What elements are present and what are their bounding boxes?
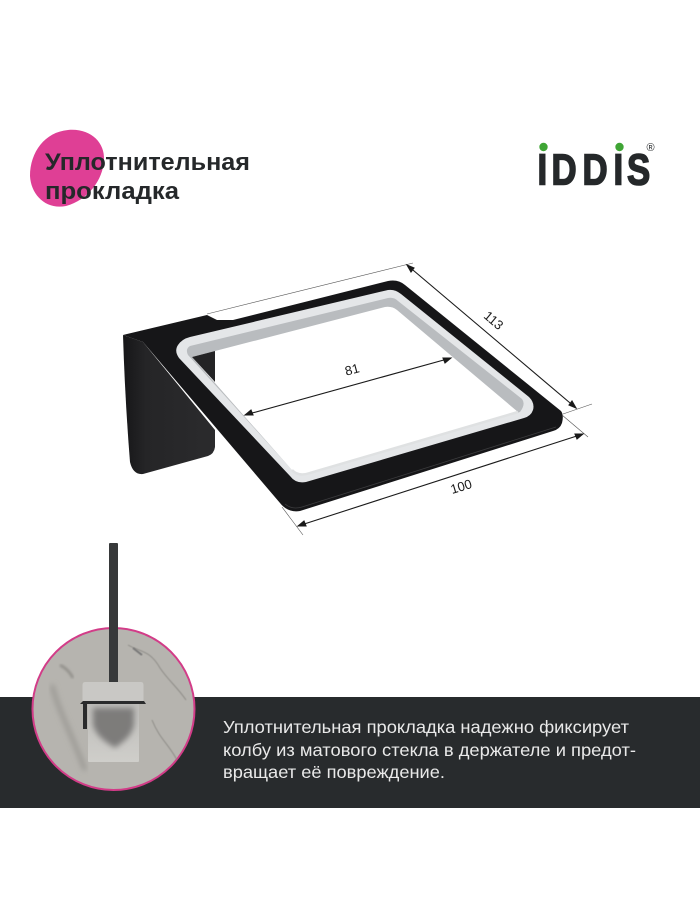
dimension 81: 81	[343, 360, 361, 379]
product: seal holder with dimensions	[123, 263, 592, 535]
seal grey band	[187, 298, 524, 475]
brush shadow in glass	[93, 708, 134, 748]
marble veins	[52, 645, 186, 770]
dimension 100: 100	[449, 476, 474, 497]
seal hole	[192, 307, 518, 474]
title: Уплотнительная	[45, 149, 250, 176]
logo: IDDIS: IDDIS	[538, 146, 650, 194]
glass body	[88, 703, 139, 762]
brush handle	[109, 543, 118, 686]
marble background	[32, 628, 194, 790]
extension lines	[207, 263, 592, 535]
glass rim	[82, 682, 144, 703]
marble circle with toilet brush	[32, 543, 194, 790]
wall mount	[123, 335, 215, 474]
description text	[223, 717, 636, 782]
seal front lip	[292, 412, 518, 474]
mount seen through hole	[192, 351, 215, 382]
holder bar	[80, 701, 146, 704]
description text: Уплотнительная прокладка надежно фиксирует	[223, 717, 629, 737]
description text: колбу из матового стекла в держателе и предот-	[223, 740, 636, 760]
tray frame	[123, 280, 563, 511]
dark text band	[0, 697, 700, 808]
title: прокладка	[45, 178, 179, 205]
seal outer	[176, 290, 534, 482]
pink blob behind heading	[30, 130, 104, 207]
dimension 113	[407, 265, 576, 408]
dimension 113: 113	[481, 308, 506, 333]
title	[45, 149, 250, 205]
frame bottom edge highlight	[285, 427, 556, 508]
dimension 81	[245, 358, 451, 415]
logo: IDDIS: ®	[646, 142, 655, 154]
description text: вращает её повреждение.	[223, 762, 445, 782]
dimension 100	[298, 434, 583, 526]
